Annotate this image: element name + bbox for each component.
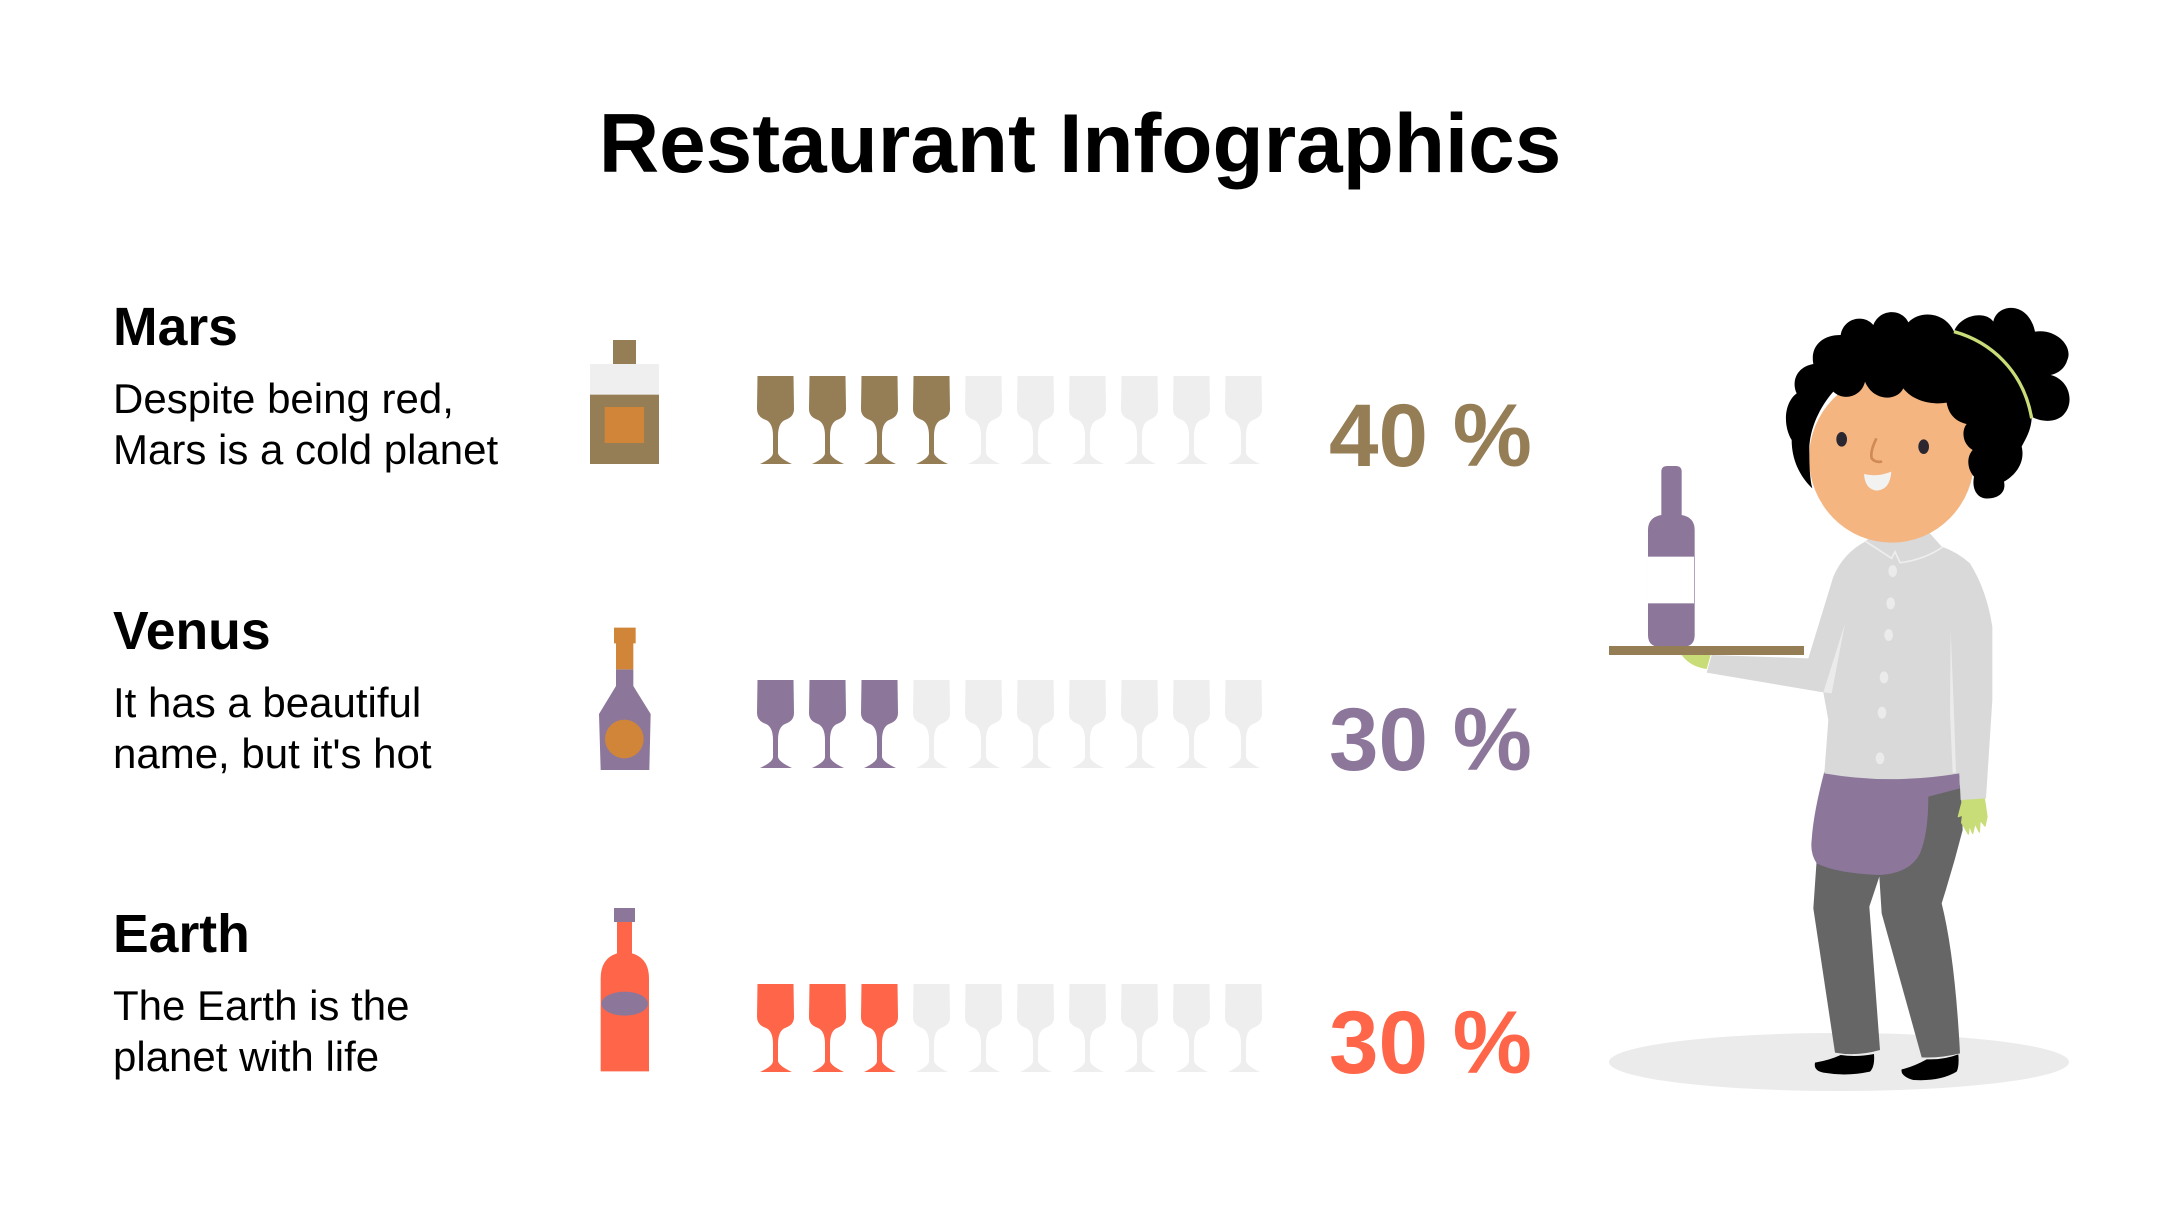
icon: tapered bottle: [599, 628, 651, 770]
heading: Venus: Venus: [113, 602, 271, 661]
icon: square liquor bottle: [590, 340, 659, 464]
waiter legs, apron and shoes: [1811, 772, 1987, 1080]
heading: Earth: Earth: [113, 905, 250, 964]
illustration: waiter with tray: [1609, 308, 2070, 1091]
hand under tray: [1682, 655, 1711, 669]
text: Venus description: name, but it's hot: [113, 730, 432, 777]
hair: [1786, 308, 2070, 498]
value: 30 %: 30 %: [1329, 689, 1532, 789]
headband: [1954, 332, 2032, 418]
row: Earth: [113, 905, 1532, 1092]
tray: [1609, 646, 1804, 655]
eyes: [1836, 432, 1929, 454]
shirt: [1707, 533, 1992, 800]
text: Earth description: planet with life: [113, 1033, 379, 1080]
text: Mars description: Mars is a cold planet: [113, 426, 499, 473]
face: [1809, 374, 1974, 543]
mouth: [1864, 472, 1891, 491]
bottle on tray: [1648, 466, 1695, 647]
icon: wine bottle: [601, 908, 649, 1071]
nose: [1871, 439, 1881, 462]
text: Venus description: It has a beautiful: [113, 679, 421, 726]
row: Mars: [113, 298, 1532, 485]
heading: Mars: Mars: [113, 298, 238, 357]
value: 40 %: 40 %: [1329, 385, 1532, 485]
floor shadow: [1609, 1033, 2069, 1091]
row: Venus: [113, 602, 1532, 789]
text: Mars description: Despite being red,: [113, 375, 454, 422]
waiter head, shirt and tray: [1609, 308, 2070, 800]
text: Earth description: The Earth is the: [113, 982, 409, 1029]
title: Restaurant Infographics: [599, 96, 1561, 190]
glasses: 4 of 10 filled: [757, 376, 1262, 464]
glasses: 3 of 10 filled: [757, 680, 1262, 768]
glasses: 3 of 10 filled: [757, 984, 1262, 1072]
value: 30 %: 30 %: [1329, 992, 1532, 1092]
